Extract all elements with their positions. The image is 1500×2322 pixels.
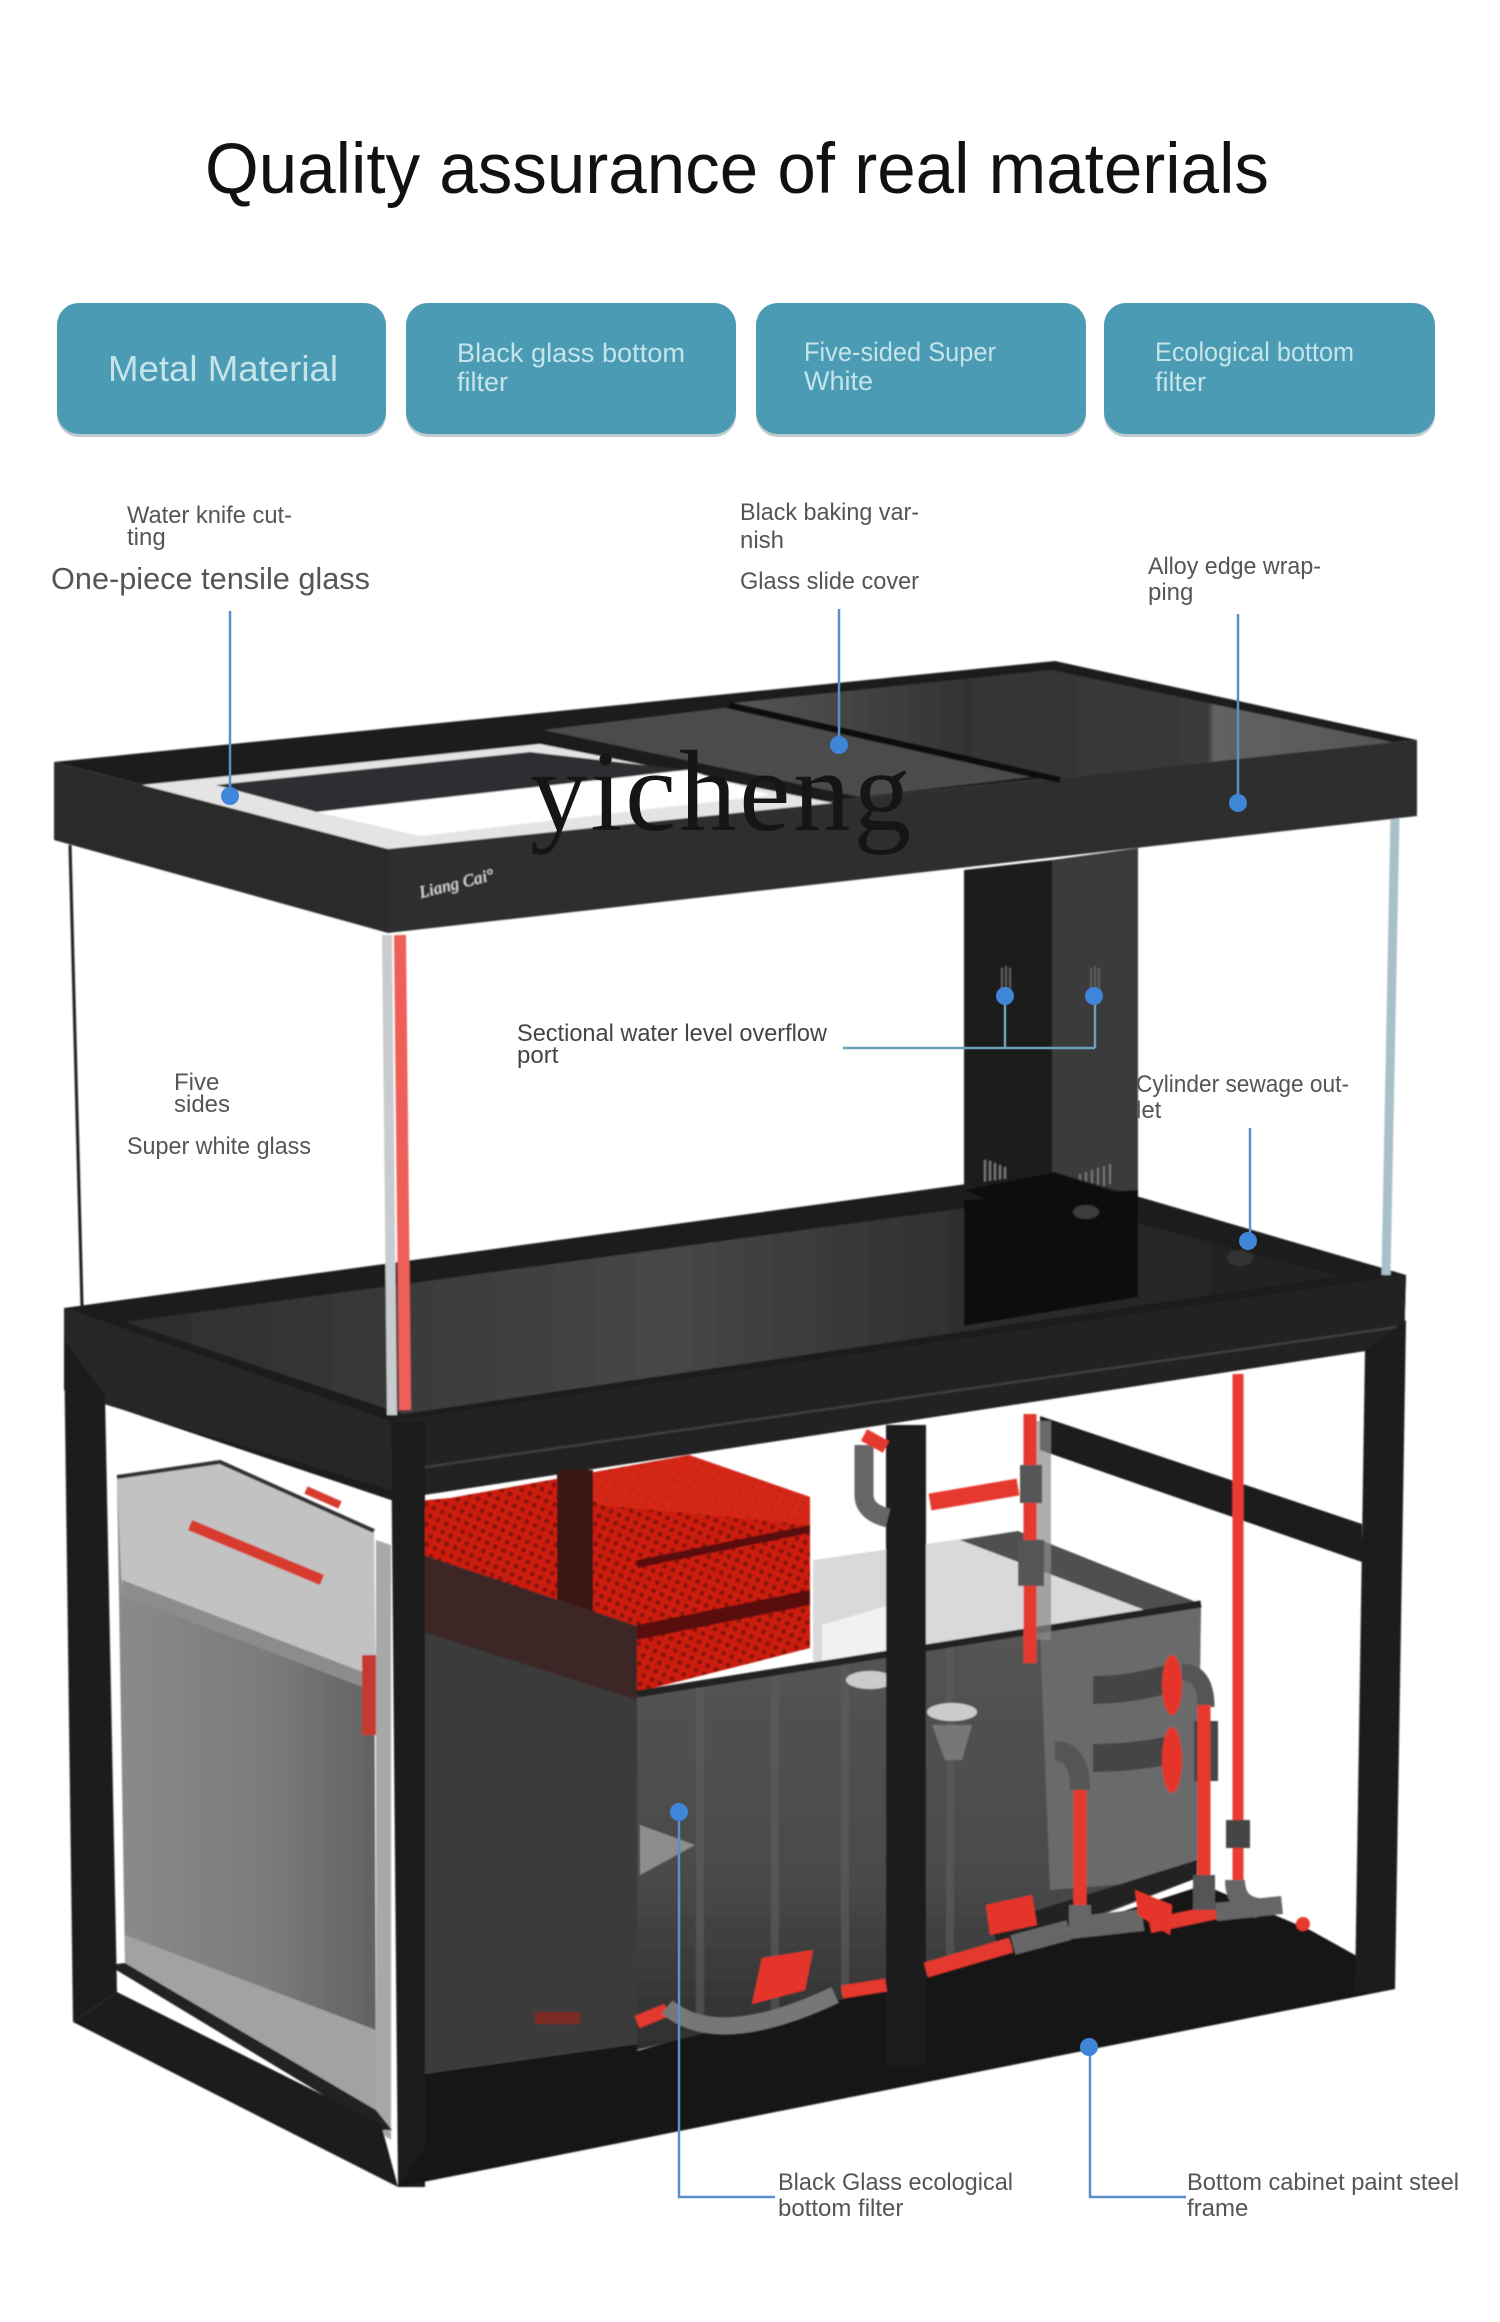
callout: cylinder sewage outlet: [1136, 1071, 1349, 1250]
tab: five-sided super white: White: [804, 366, 873, 396]
tab: ecological bottom filter: filter: [1155, 367, 1206, 397]
tab: black glass bottom filter: filter: [457, 367, 508, 397]
overflow column: [964, 848, 1138, 1230]
watermark: yicheng: [530, 728, 911, 855]
callout: one-piece tensile glass: One-piece tensile glass: [51, 561, 370, 596]
callout: sectional overflow port: [517, 987, 1103, 1069]
callout: five sides super white glass: sides: [174, 1091, 230, 1118]
tab: ecological bottom filter: [1104, 303, 1435, 437]
tab: five-sided super white: Five-sided Super: [804, 337, 996, 367]
callout: cylinder sewage outlet: Cylinder sewage out-: [1136, 1071, 1349, 1098]
callout: five sides super white glass: [127, 1069, 311, 1160]
callout: one-piece tensile glass: ting: [127, 524, 166, 551]
tab: metal material: [57, 303, 386, 437]
callout: bottom cabinet paint steel frame: frame: [1187, 2195, 1248, 2222]
front filter compartment: [417, 1553, 637, 2120]
callout: cylinder sewage outlet: let: [1136, 1097, 1162, 1124]
callout: bottom cabinet paint steel frame: Bottom cabinet paint steel: [1187, 2169, 1459, 2196]
callout: black glass ecological bottom filter: [670, 1803, 1013, 2222]
callout: glass slide cover: [740, 499, 919, 754]
steel cabinet frame: [64, 1320, 1406, 2187]
callout: sectional overflow port: Sectional water level overflow: [517, 1020, 828, 1047]
red filter cube: [417, 1455, 810, 1692]
title: Quality assurance of real materials: [205, 130, 1269, 209]
callout: alloy edge wrapping: Alloy edge wrap-: [1148, 553, 1321, 580]
callout: glass slide cover: nish: [740, 527, 784, 554]
main sump tank: [637, 1604, 1201, 2050]
aquarium lid: [54, 661, 1417, 933]
tab: black glass bottom filter: [406, 303, 736, 437]
cabinet floor: [425, 1885, 1395, 2160]
tab: five-sided super white: [756, 303, 1086, 437]
callout: black glass ecological bottom filter: Black Glass ecological: [778, 2169, 1013, 2196]
callout: five sides super white glass: Super white glass: [127, 1133, 311, 1160]
plumbing pipes: [637, 1374, 1310, 2026]
callout: alloy edge wrapping: [1148, 553, 1321, 812]
callout: glass slide cover: Black baking var-: [740, 499, 919, 526]
glass tank edges: [70, 815, 1395, 1415]
aquarium illustration: [54, 661, 1417, 2187]
rear sump glass: [813, 1531, 1201, 1680]
tab: ecological bottom filter: Ecological bottom: [1155, 337, 1354, 367]
tab: metal material: Metal Material: [108, 348, 338, 389]
left return tank: [108, 1462, 392, 2140]
callout: alloy edge wrapping: ping: [1148, 579, 1193, 606]
stand top rim and floor: [64, 1172, 1406, 1500]
feature tabs: [57, 303, 1435, 437]
callout: glass slide cover: Glass slide cover: [740, 568, 919, 595]
callout: five sides super white glass: Five: [174, 1069, 219, 1096]
back rail: [1040, 1416, 1362, 1562]
lid logo: Liang Cai°: [416, 865, 496, 902]
callout: black glass ecological bottom filter: bottom filter: [778, 2195, 903, 2222]
lid glass panels: [142, 744, 833, 849]
callout: one-piece tensile glass: Water knife cut-: [127, 502, 292, 529]
callout: sectional overflow port: port: [517, 1042, 559, 1069]
callout: one-piece tensile glass: [51, 502, 370, 805]
callout: bottom cabinet paint steel frame: [1080, 2038, 1459, 2222]
tab: black glass bottom filter: Black glass bottom: [457, 338, 685, 368]
